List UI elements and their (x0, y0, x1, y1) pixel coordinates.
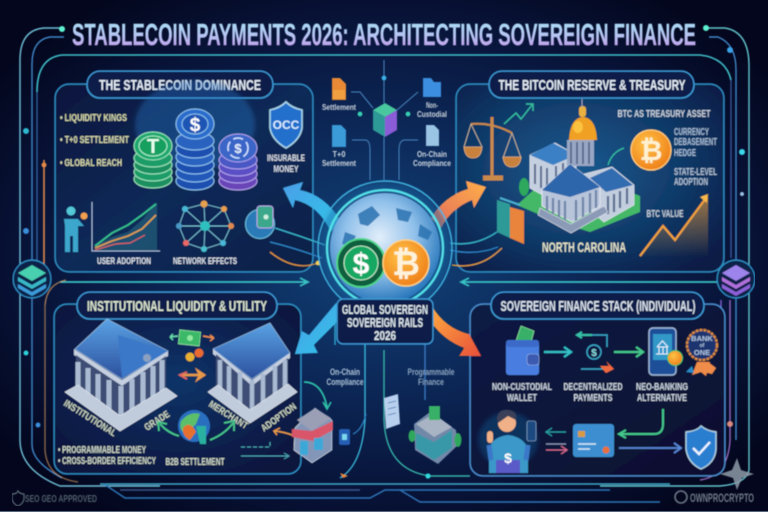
rail lines (270, 228, 325, 266)
label: programmable finance: Programmable (408, 367, 454, 377)
label: t+0 settlement: T+0 (332, 149, 346, 159)
arrows: person to card (546, 428, 567, 454)
label: merchant adoption: ADOPTION (259, 401, 299, 434)
panel: bitcoin reserve (450, 71, 724, 272)
hub label: 2026 (374, 329, 396, 343)
icon: settlement doc (332, 78, 346, 100)
heading: stablecoin dominance: THE STABLECOIN DOMINANCE (99, 77, 261, 94)
arrow: neo-bank to card (619, 409, 663, 438)
label: on-chain compliance lower (326, 367, 364, 387)
node: orange endpoint (340, 473, 348, 478)
heading: bitcoin reserve: THE BITCOIN RESERVE & TREASURY (498, 77, 686, 94)
label: on-chain compliance: Compliance (413, 158, 451, 168)
hub label (337, 299, 433, 344)
icon: bitcoin coin (608, 130, 671, 170)
label: bullet list institutional: • PROGRAMMABLE MONEY (58, 444, 146, 456)
label: institutional grade (61, 398, 172, 439)
coin stack: dollar (176, 109, 214, 190)
icon: phone (649, 328, 682, 375)
label: insurable money: MONEY (274, 164, 299, 175)
hub label: GLOBAL SOVEREIGN (342, 303, 428, 317)
watermark: seo geo approved (12, 491, 97, 506)
icon: center cube (373, 103, 397, 137)
label: non-custodial: Custodial (417, 109, 447, 119)
heading: bitcoin reserve (489, 71, 694, 98)
label: neo-banking alternative: ALTERNATIVE (637, 392, 687, 404)
glow ring (319, 182, 451, 314)
coin: bitcoin (383, 240, 429, 286)
icon: security shield (686, 426, 716, 469)
label: state-level adoption: STATE-LEVEL (674, 167, 717, 178)
label: merchant adoption: MERCHANT (206, 399, 250, 432)
label: decentralized payments: PAYMENTS (574, 392, 612, 404)
icon: t+0 doc (332, 125, 346, 147)
panel: institutional liquidity (54, 292, 366, 474)
bullet list (60, 112, 129, 169)
heading: institutional liquidity (77, 292, 277, 319)
icon: receipt (384, 394, 400, 429)
coin stack: usdc: $ (234, 141, 242, 156)
label: currency hedge (674, 127, 717, 159)
orbit rings (318, 181, 452, 315)
icon: compliance doc (426, 125, 439, 146)
coin stack: tether (134, 132, 172, 188)
label: non-custodial wallet: NON-CUSTODIAL (492, 381, 552, 393)
node: teal dot lower (425, 473, 431, 479)
label: non-custodial wallet (492, 381, 552, 404)
icon: growth line (504, 104, 533, 124)
label: bullet list institutional (58, 444, 156, 467)
label: b2b settlement: B2B SETTLEMENT (166, 456, 225, 468)
icon: right layers node (717, 260, 755, 298)
label: bullet list institutional: • CROSS-BORDER EFFICIENCY (58, 455, 156, 467)
center connector lines (351, 60, 418, 180)
label: neo-banking alternative: NEO-BANKING (636, 381, 688, 393)
heading: institutional liquidity: INSTITUTIONAL LIQUIDITY & UTILITY (87, 298, 267, 315)
label: t+0 settlement (322, 149, 356, 168)
watermark: ownprocrypto (675, 491, 754, 505)
globe (330, 193, 440, 303)
arrow: globe to bitcoin panel (431, 181, 486, 228)
icon: person with phone: $ (504, 450, 512, 466)
bullet list: • GLOBAL REACH (60, 157, 122, 169)
coin: bitcoin: ₿ (392, 245, 420, 283)
label: settlement: Settlement (322, 102, 356, 112)
bullet list: • LIQUIDITY KINGS (60, 112, 127, 124)
icon: balance scale (464, 117, 521, 178)
label: on-chain compliance lower: On-Chain (330, 367, 360, 377)
icon: settlement globe (178, 410, 210, 444)
icon: bank card (573, 424, 614, 457)
heading: sovereign finance stack (491, 292, 704, 319)
label: decentralized payments: DECENTRALIZED (564, 381, 623, 393)
label: programmable finance (408, 367, 454, 387)
label: on-chain compliance lower: Compliance (326, 377, 364, 387)
icon: decentralized payments (577, 332, 614, 373)
coin stack: tether: T (147, 136, 159, 158)
arrow: globe to institutional panel (295, 303, 345, 354)
icon: wallet (506, 326, 539, 375)
coin: dollar: $ (353, 248, 370, 281)
icon: user figure (64, 206, 88, 252)
glow behind stacks (135, 80, 255, 170)
panel: stablecoin dominance (55, 71, 325, 272)
arrow: dashed flows (241, 428, 292, 459)
icon: left layers node (13, 260, 51, 298)
panel: sovereign finance stack (470, 292, 725, 476)
arrow: payments to phone (614, 347, 643, 357)
coin stack: dollar: $ (190, 115, 201, 136)
scale pans (464, 147, 521, 167)
label: non-custodial (417, 100, 447, 119)
icon: bank of one badge (686, 330, 717, 376)
frame nodes (23, 25, 745, 428)
rail lines right (450, 232, 502, 266)
arrow: card to shield (619, 443, 681, 453)
label: state-level adoption: ADOPTION (674, 177, 708, 188)
icon: small store (408, 406, 462, 464)
label: merchant adoption (206, 399, 299, 434)
icon: bank of one badge: BANK (691, 334, 713, 343)
watermark: seo geo approved: SEO GEO APPROVED (25, 493, 97, 505)
label: user adoption: USER ADOPTION (97, 256, 151, 267)
label: network effects: NETWORK EFFECTS (173, 256, 237, 267)
label: currency hedge: CURRENCY (674, 127, 709, 138)
coin stack: usdc (219, 134, 257, 190)
icon: sparkle (720, 458, 754, 490)
label: non-custodial: Non- (426, 100, 438, 110)
icon: occ shield (270, 102, 302, 148)
chart: network (176, 200, 234, 252)
label: btc value: BTC VALUE (646, 208, 684, 220)
label: insurable money: INSURABLE (267, 153, 305, 164)
arrows around globe (158, 421, 234, 440)
label: insurable money (267, 153, 305, 175)
icon: capitol building (517, 99, 640, 233)
coin: dollar (337, 239, 385, 287)
icon: documents (497, 198, 524, 244)
arrow: wallet to payments (544, 347, 571, 357)
icon: wallet globe (246, 206, 274, 238)
label: on-chain compliance: On-Chain (417, 149, 447, 159)
chart: user adoption (92, 202, 160, 251)
icon: person with phone (478, 410, 538, 473)
arrow: globe to sovereign panel (431, 306, 481, 356)
icon: cash and coins (170, 330, 214, 362)
arrow: globe to stablecoin panel (283, 182, 340, 232)
label: state-level adoption (674, 167, 717, 188)
icon: bank right (208, 323, 297, 423)
label: institutional grade: INSTITUTIONAL (61, 398, 118, 439)
label: north carolina: NORTH CAROLINA (542, 240, 626, 255)
icon: bank left (65, 319, 177, 431)
bullet list: • T+0 SETTLEMENT (60, 134, 129, 146)
icon: bank of one badge: of (700, 343, 705, 349)
small center document nodes (322, 60, 451, 180)
icon: occ shield: OCC (273, 118, 300, 132)
arrow: store to compliance (304, 382, 331, 409)
icon: bitcoin coin: ₿ (640, 135, 662, 166)
label: t+0 settlement: Settlement (322, 158, 356, 168)
icon: decentralized payments: $ (591, 348, 597, 359)
icon: bank of one badge: ONE (694, 348, 710, 357)
label: programmable finance: Finance (418, 377, 444, 387)
label: btc treasury asset: BTC AS TREASURY ASSET (618, 108, 711, 120)
label: institutional grade: GRADE (143, 409, 172, 434)
central hub (318, 181, 452, 344)
bottom edge (0, 511, 768, 512)
label: currency hedge: DEBASEMENT (674, 137, 717, 148)
hub label: SOVEREIGN RAILS (347, 316, 423, 330)
label: neo-banking alternative (636, 381, 688, 404)
icon: merchant store (292, 408, 333, 463)
label: non-custodial wallet: WALLET (507, 392, 537, 404)
icon: folder (423, 78, 441, 97)
label: currency hedge: HEDGE (674, 148, 696, 159)
chart: btc value (640, 194, 708, 258)
heading: stablecoin dominance (87, 71, 273, 98)
icon: exchange arrow (180, 371, 204, 379)
label: on-chain compliance (413, 149, 451, 168)
icon: blue chip (339, 414, 366, 445)
label: decentralized payments (564, 381, 623, 404)
